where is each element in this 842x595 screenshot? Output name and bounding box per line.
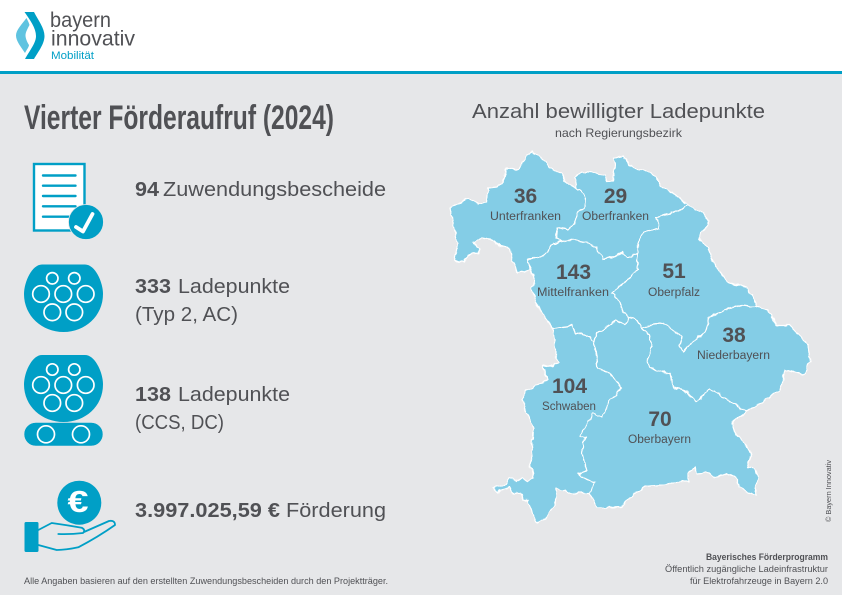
- region: Mittelfranken: [528, 240, 638, 342]
- icon: document with check mark: [34, 164, 104, 240]
- region: Niederbayern: [642, 305, 810, 412]
- logo: bayern innovativ Mobilität: innovativ: [51, 28, 135, 50]
- stat: 333 Ladepunkte: [135, 276, 290, 326]
- region: Schwaben: 104: [552, 375, 587, 398]
- region: Schwaben: Schwaben: [542, 401, 596, 413]
- programme note: für Elektrofahrzeuge in Bayern 2.0: [690, 576, 828, 586]
- region: Oberpfalz: Oberpfalz: [648, 287, 700, 299]
- stat: 333 Ladepunkte: 333: [135, 276, 171, 298]
- map heading: [472, 101, 765, 140]
- title: Vierter Förderaufruf (2024): [24, 99, 334, 137]
- region: Mittelfranken: 143: [556, 261, 591, 284]
- region: Oberfranken: Oberfranken: [582, 211, 649, 223]
- region: Oberbayern: 70: [648, 408, 672, 431]
- map heading: Anzahl bewilligter Ladepunkte: [472, 101, 765, 123]
- region: Unterfranken: Unterfranken: [490, 211, 561, 223]
- logo: bayern innovativ Mobilität: bayern: [50, 9, 111, 32]
- programme note: Öffentlich zugängliche Ladeinfrastruktur: [665, 564, 828, 574]
- logo: bayern innovativ Mobilität: Mobilität: [51, 50, 94, 62]
- map heading: nach Regierungsbezirk: [555, 126, 683, 140]
- stat: 333 Ladepunkte: Ladepunkte: [178, 276, 290, 298]
- stat: Zuwendungsbescheide: Zuwendungsbescheide: [163, 179, 386, 201]
- stat: Förderung: Förderung: [286, 500, 386, 522]
- region: Niederbayern: Niederbayern: [697, 350, 770, 362]
- stat: Förderung: [135, 500, 386, 522]
- region: Oberpfalz: [612, 205, 757, 352]
- icon: hand holding euro coin: €: [68, 484, 88, 519]
- region: Schwaben: [493, 325, 622, 523]
- copyright note: © Bayern Innovativ: [825, 459, 833, 522]
- map: Bavaria by Regierungsbezirk: [450, 152, 810, 523]
- stat: 138 Ladepunkte: 138: [135, 384, 171, 406]
- stat: Förderung: 3.997.025,59 €: [135, 500, 280, 522]
- icon: CCS plug: [24, 355, 103, 446]
- region: Mittelfranken: Mittelfranken: [537, 287, 609, 299]
- region: Niederbayern: 38: [722, 324, 746, 347]
- stat: 138 Ladepunkte: Ladepunkte: [178, 384, 290, 406]
- region: Oberbayern: Oberbayern: [628, 434, 691, 446]
- region: Unterfranken: [450, 152, 586, 273]
- footnote: Alle Angaben basieren auf den erstellten Zuwendungsbescheiden durch den Projektträger.: [24, 576, 388, 586]
- stat: Zuwendungsbescheide: 94: [135, 179, 160, 201]
- icon: hand holding euro coin: [24, 481, 115, 552]
- region: Oberbayern: [578, 317, 758, 508]
- header band: [0, 0, 842, 74]
- region: Oberfranken: 29: [604, 185, 627, 208]
- programme note: [665, 552, 828, 586]
- programme note: Bayerisches Förderprogramm: [706, 552, 828, 562]
- region: Oberpfalz: 51: [662, 260, 686, 283]
- stat: 138 Ladepunkte: (CCS, DC): [135, 412, 224, 434]
- logo: bayern innovativ Mobilität: [16, 9, 135, 62]
- icon: Typ 2 plug: [24, 264, 103, 332]
- region: Unterfranken: 36: [514, 185, 537, 208]
- region: Oberfranken: [556, 155, 688, 260]
- stat: 138 Ladepunkte: [135, 384, 290, 434]
- stat: 333 Ladepunkte: (Typ 2, AC): [135, 304, 238, 326]
